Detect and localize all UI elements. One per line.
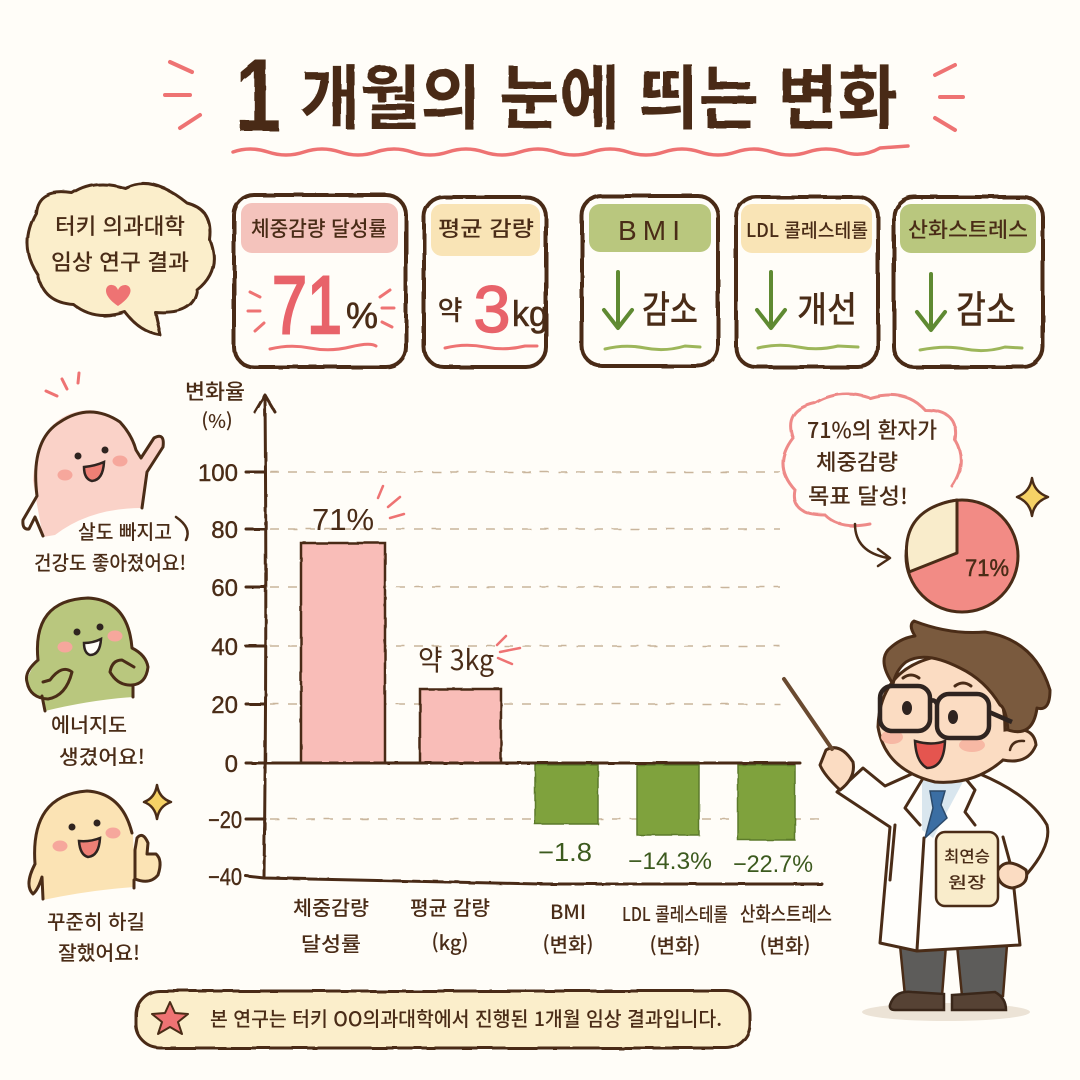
y axis title: 변화율: [185, 376, 245, 406]
value labels: 약 3kg: [418, 639, 494, 679]
bar: average loss: [420, 689, 501, 763]
lapels: [890, 778, 1012, 950]
card: average weight loss: 평균 감량: [438, 213, 534, 243]
category labels: (변화): [542, 929, 594, 958]
category labels: (변화): [759, 930, 811, 959]
icon: thumbs up: [135, 835, 160, 881]
bar: goal achievement: [301, 543, 385, 763]
bar: oxidative stress: [738, 765, 795, 840]
y axis tick labels: −40: [208, 864, 242, 891]
icon: sparkle: [144, 785, 171, 819]
caption: 에너지도: [51, 709, 127, 738]
callout: 71% of patients: [783, 394, 961, 526]
card: average weight loss: [424, 197, 548, 367]
card: BMI decrease: BMI: [618, 215, 680, 246]
mouth: [915, 741, 945, 768]
y axis tick labels: 0: [225, 751, 238, 778]
icon: heart: [106, 285, 131, 306]
caption: [51, 709, 145, 770]
icon: sparkle: [1017, 478, 1048, 516]
card: average weight loss: 3: [474, 272, 510, 346]
character: pink blob waving: [23, 373, 188, 576]
card: goal achievement rate 71%: %: [346, 295, 378, 336]
other hand: [997, 863, 1027, 888]
category labels: (변화): [649, 930, 701, 959]
shoes: [890, 992, 1006, 1010]
shirt and tie: [922, 775, 965, 838]
callout: 71% of patients: 71%의 환자가: [807, 413, 937, 445]
value labels: −1.8: [538, 837, 592, 867]
cheeks: [881, 730, 903, 744]
card: oxidative stress decrease: 감소: [956, 279, 1016, 334]
card: LDL cholesterol improvement: LDL 콜레스테롤: [746, 216, 868, 243]
footer note banner: 본 연구는 터키 OO의과대학에서 진행된 1개월 임상 결과입니다.: [210, 1003, 722, 1032]
card: LDL cholesterol improvement: 개선: [797, 281, 857, 333]
card: goal achievement rate 71%: 체중감량 달성률: [251, 213, 387, 243]
pointer stick: [784, 679, 832, 749]
caption: 건강도 좋아졌어요!: [34, 547, 186, 576]
y axis title: [185, 376, 245, 434]
title: 개월의 눈에 띄는 변화: [300, 43, 898, 144]
y axis tick labels: 60: [211, 575, 238, 602]
speech bubble: study source: 터키 의과대학: [55, 209, 185, 241]
footer note banner: [136, 991, 750, 1048]
caption: 잘했어요!: [58, 937, 140, 966]
eyes and brows: [902, 701, 912, 715]
card: goal achievement rate 71%: 71: [272, 260, 342, 351]
category labels: BMI: [550, 896, 586, 925]
value labels: 71%: [312, 502, 374, 537]
card: LDL cholesterol improvement: [736, 197, 878, 367]
category labels: 평균 감량: [410, 892, 490, 921]
arrow to pie: [855, 524, 890, 566]
category labels: (kg): [431, 927, 469, 956]
y axis tick labels: 100: [198, 460, 238, 487]
caption: [47, 906, 145, 966]
card: BMI decrease: 감소: [642, 279, 698, 334]
caption: [34, 516, 188, 576]
y axis tick labels: [198, 460, 242, 891]
y axis tick labels: −20: [208, 807, 242, 834]
bar: BMI: [535, 765, 598, 824]
pie chart 71%: [906, 500, 1018, 612]
speech bubble: study source: 임상 연구 결과: [51, 245, 189, 277]
card: BMI decrease: [582, 196, 718, 366]
bar: LDL: [637, 765, 699, 835]
callout: 71% of patients: 목표 달성!: [808, 479, 908, 511]
name badge: [936, 832, 998, 906]
icon: star: [152, 1002, 188, 1034]
value labels: −22.7%: [733, 851, 813, 878]
card: goal achievement rate 71%: [234, 195, 406, 367]
y axis tick labels: 40: [211, 634, 238, 661]
title decorative rays right: [935, 65, 963, 130]
name badge: 원장: [948, 869, 986, 893]
y axis tick labels: 20: [211, 692, 238, 719]
title: 1: [235, 38, 281, 154]
category labels: 달성률: [301, 928, 361, 957]
legs: [900, 945, 1007, 996]
card: average weight loss: 약: [438, 289, 462, 328]
name badge: 최연승: [944, 843, 990, 867]
axes: [246, 395, 822, 884]
category labels: 산화스트레스: [740, 898, 832, 927]
caption: 생겼어요!: [59, 741, 145, 770]
head: [878, 655, 1036, 782]
shadow: [862, 1003, 1030, 1021]
value labels: [312, 486, 813, 878]
y axis tick labels: 80: [211, 517, 238, 544]
hand: [820, 748, 853, 790]
card: oxidative stress decrease: [894, 197, 1043, 367]
title decorative rays left: [165, 62, 200, 128]
character: green blob: [26, 598, 148, 770]
category labels: 체중감량: [293, 892, 369, 921]
speech bubble: study source: [27, 183, 214, 335]
hair: [884, 621, 1050, 732]
category labels: LDL 콜레스테롤: [622, 900, 728, 927]
glasses: [880, 686, 1012, 738]
value labels: −14.3%: [628, 848, 712, 875]
doctor character: [784, 621, 1050, 1021]
grid lines: [270, 472, 820, 819]
callout: 71% of patients: 체중감량: [816, 445, 898, 477]
bar chart: [185, 376, 832, 959]
caption: 꾸준히 하길: [47, 906, 145, 935]
card: oxidative stress decrease: 산화스트레스: [908, 214, 1028, 244]
y axis title: (%): [201, 407, 233, 434]
caption: 살도 빠지고: [78, 516, 172, 545]
card: average weight loss: kg: [512, 293, 548, 334]
pie chart 71%: 71%: [965, 555, 1009, 582]
title wavy underline: [233, 146, 908, 155]
category labels: [293, 892, 832, 959]
character: yellow blob thumbs up: [29, 785, 171, 966]
coat: [837, 768, 1048, 951]
